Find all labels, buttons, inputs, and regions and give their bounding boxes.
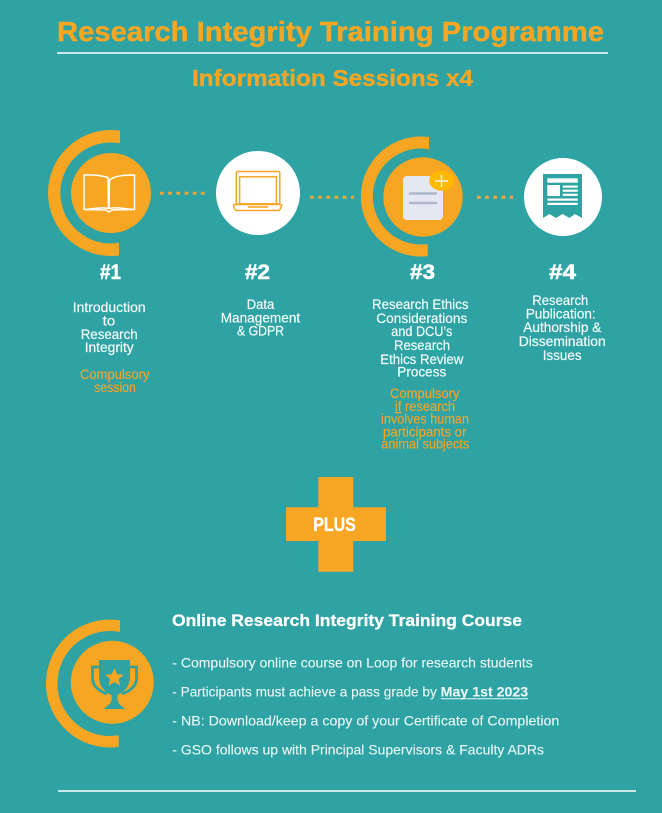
online course bullet list: May 1st 2023 — [441, 684, 528, 700]
dotted connector 2 — [310, 196, 354, 199]
text: session 3 name: Ethics Review — [380, 351, 464, 367]
text: session 1 note — [80, 367, 150, 395]
text: session 2 name: Management — [221, 310, 300, 326]
icon: newspaper — [524, 158, 602, 236]
session 2 — [216, 151, 300, 339]
plus sign: PLUS — [313, 515, 356, 536]
text: session 3 note — [381, 386, 470, 452]
text: session 3 name: and DCU’s — [391, 323, 452, 339]
title: Research Integrity Training Programme — [57, 16, 604, 47]
online course bullet list: - Compulsory online course on Loop for research students — [172, 655, 533, 671]
icon: arc 1 — [48, 130, 120, 256]
online course bullet list: - NB: Download/keep a copy of your Certificate of Completion — [172, 713, 559, 729]
online course bullet list: - Participants must achieve a pass grade by — [172, 684, 437, 700]
online course bullet list — [172, 655, 559, 758]
text: session 4 name: Authorship & — [523, 319, 602, 335]
text: session 1 name: Integrity — [85, 339, 134, 355]
text: session 3 name: Considerations — [376, 310, 467, 326]
session 4 — [519, 158, 606, 363]
text: session 3 name: Process — [397, 364, 446, 380]
icon: arc trophy — [46, 620, 120, 748]
text: session 4 name: Research — [532, 292, 588, 308]
plus sign — [286, 477, 386, 572]
text: session 1 note: Compulsory — [80, 367, 150, 382]
icon: arc 3 — [361, 136, 429, 256]
text: session 4 name — [519, 292, 606, 363]
text: session 3 name: Research — [394, 337, 450, 353]
text: session 4 name: Issues — [543, 347, 582, 363]
icon: trophy badge — [46, 620, 154, 748]
text: session 3 note: animal subjects — [381, 437, 470, 452]
dotted connector 3 — [477, 196, 513, 199]
dotted connector 1 — [160, 192, 205, 195]
text: session 1 note: session — [94, 380, 136, 395]
text: session 3 note: Compulsory — [390, 386, 460, 401]
text: session 1 name — [73, 299, 146, 355]
icon: open book — [71, 153, 151, 233]
number 4: #4 — [549, 261, 576, 284]
text: session 2 name: Data — [247, 296, 274, 312]
text: session 3 name: Research Ethics — [372, 296, 468, 312]
text: session 2 name — [221, 296, 300, 339]
icon: laptop — [216, 151, 300, 235]
text: session 1 name: Research — [81, 326, 138, 342]
session 1 — [48, 130, 151, 395]
online course heading: Online Research Integrity Training Course — [172, 611, 522, 630]
text: session 2 name: & GDPR — [237, 323, 284, 339]
session 3 — [361, 136, 470, 452]
icon: document with plus badge — [383, 157, 463, 237]
text: session 3 note: participants or — [383, 425, 467, 440]
online course bullet list: - GSO follows up with Principal Supervisors & Faculty ADRs — [172, 742, 544, 758]
text: session 3 note: if research — [395, 399, 455, 414]
text: session 1 name: Introduction — [73, 299, 146, 315]
number 2: #2 — [245, 261, 270, 284]
icon: trophy — [92, 660, 136, 709]
text: session 1 name: to — [103, 312, 115, 328]
text: session 4 name: Dissemination — [519, 333, 606, 349]
text: session 3 name — [372, 296, 468, 380]
text: session 4 name: Publication: — [526, 306, 596, 322]
number 3: #3 — [410, 261, 435, 284]
number 1: #1 — [100, 261, 121, 284]
text: session 3 note: involves human — [381, 412, 469, 427]
subtitle: Information Sessions x4 — [192, 65, 473, 91]
